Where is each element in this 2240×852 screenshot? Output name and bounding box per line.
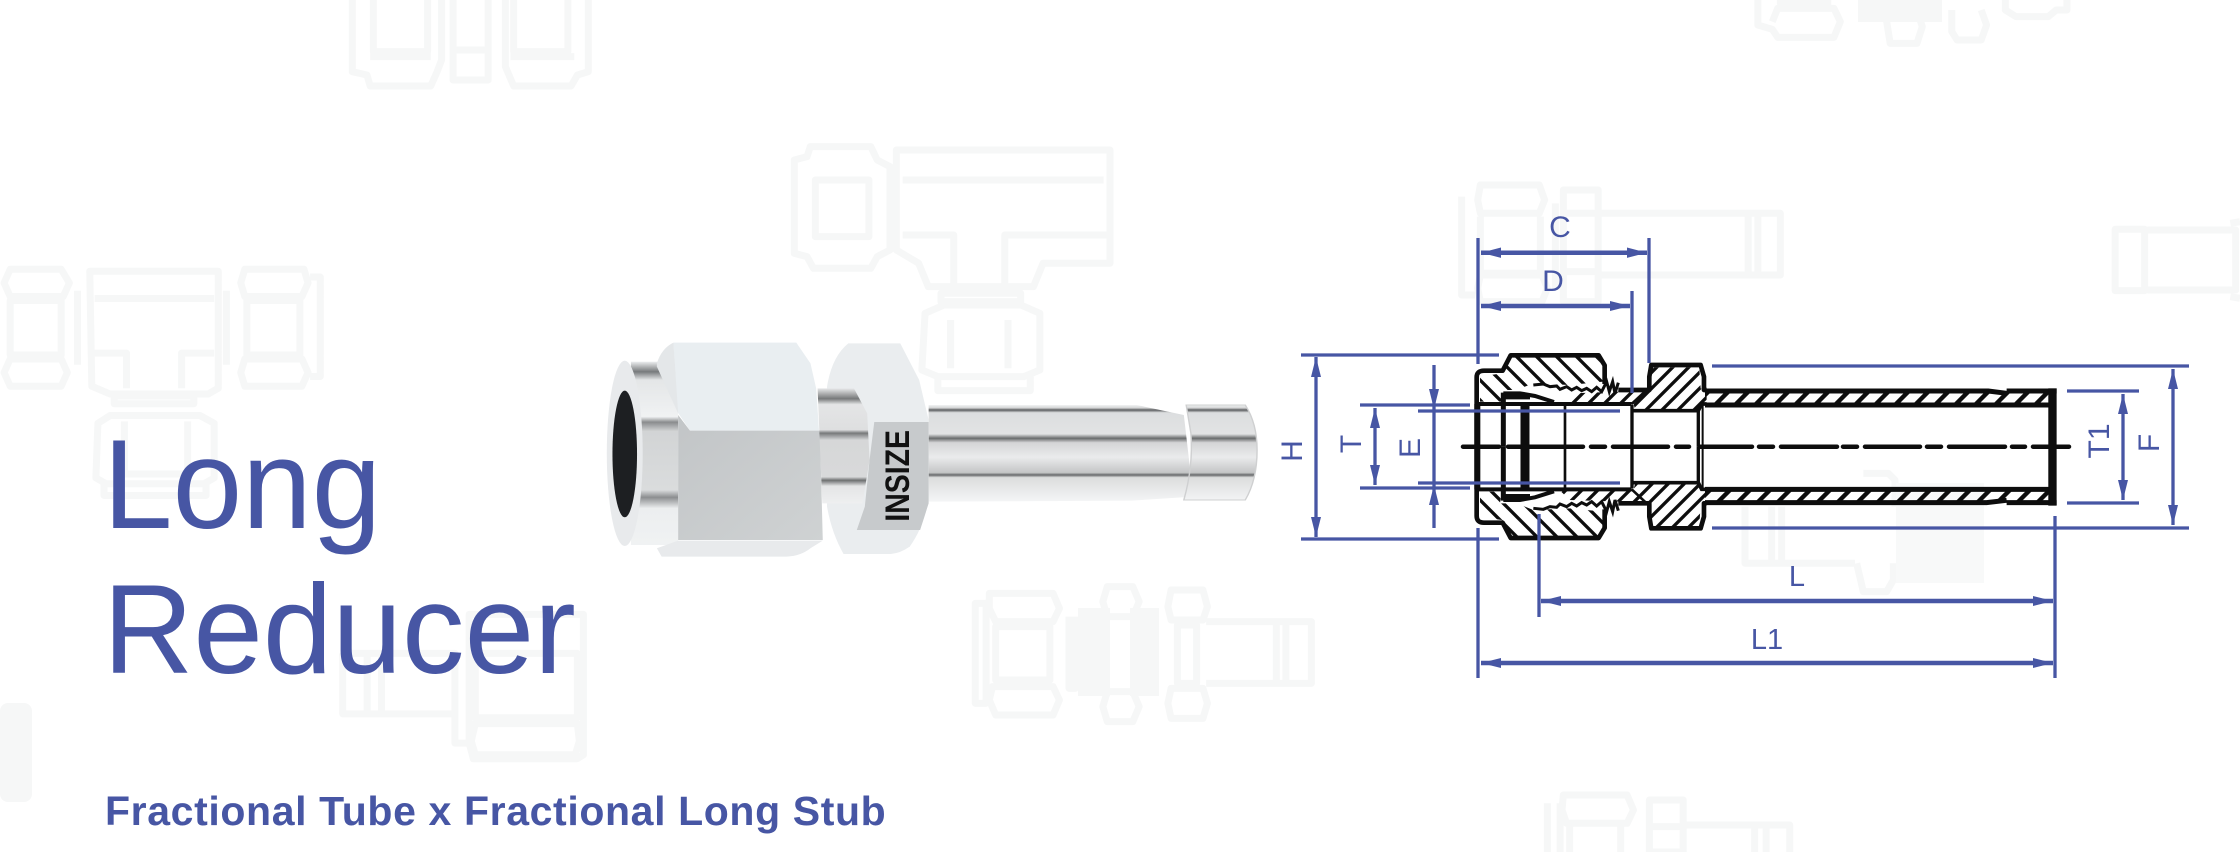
subtitle: Fractional Tube x Fractional Long Stub <box>105 788 886 834</box>
tube stub <box>929 405 1193 502</box>
title: Long <box>103 413 381 555</box>
technical cross-section drawing <box>1463 355 2069 538</box>
ghost fitting: behind dimensions C and D <box>1462 185 1780 302</box>
engraved brand: INSIZE <box>879 430 917 522</box>
ghost fitting: centre tee <box>794 147 1110 391</box>
rear hexagon face <box>857 422 929 530</box>
centre line <box>1463 444 2069 449</box>
ghost fitting: top right <box>1758 0 2067 43</box>
ghost fitting: near reducer title <box>343 614 583 759</box>
dimension label: T: T <box>1335 435 1368 453</box>
dimension label: C: C <box>1549 211 1571 244</box>
dimension label: D: D <box>1542 265 1564 298</box>
collar front face <box>607 361 643 546</box>
ghost fitting: left tee <box>4 269 320 495</box>
product photo: stainless steel fitting <box>607 343 1257 557</box>
dimension label: L1: L1 <box>1751 624 1783 656</box>
nut main face <box>678 415 823 540</box>
dimension label: H: H <box>1276 440 1309 462</box>
stub end cap <box>1184 405 1257 500</box>
dimension label: F: F <box>2133 434 2166 452</box>
ghost fitting: under tube <box>1745 473 1895 592</box>
dimension label: T1: T1 <box>2083 423 2116 459</box>
nut top face <box>673 343 819 431</box>
long stub section <box>1705 388 2057 506</box>
title <box>103 413 576 700</box>
dimension label: L: L <box>1789 561 1805 593</box>
bore opening <box>612 391 637 517</box>
dimension lines <box>1301 238 2189 678</box>
ghost fitting: bottom right <box>1547 795 1790 852</box>
ghost fitting: top centre-left <box>352 0 588 86</box>
ghost fitting: bottom centre <box>975 587 1311 722</box>
neck <box>818 388 870 503</box>
dimension label: E: E <box>1394 438 1427 458</box>
nut chamfer <box>657 343 678 413</box>
rear collar <box>631 362 678 545</box>
ghost fitting: right edge <box>2115 222 2240 298</box>
arrowheads <box>1311 248 2178 668</box>
fitting body section <box>1477 355 1707 538</box>
rear hexagon <box>827 343 929 554</box>
title: Reducer <box>103 558 576 700</box>
nut lower face <box>657 541 823 557</box>
